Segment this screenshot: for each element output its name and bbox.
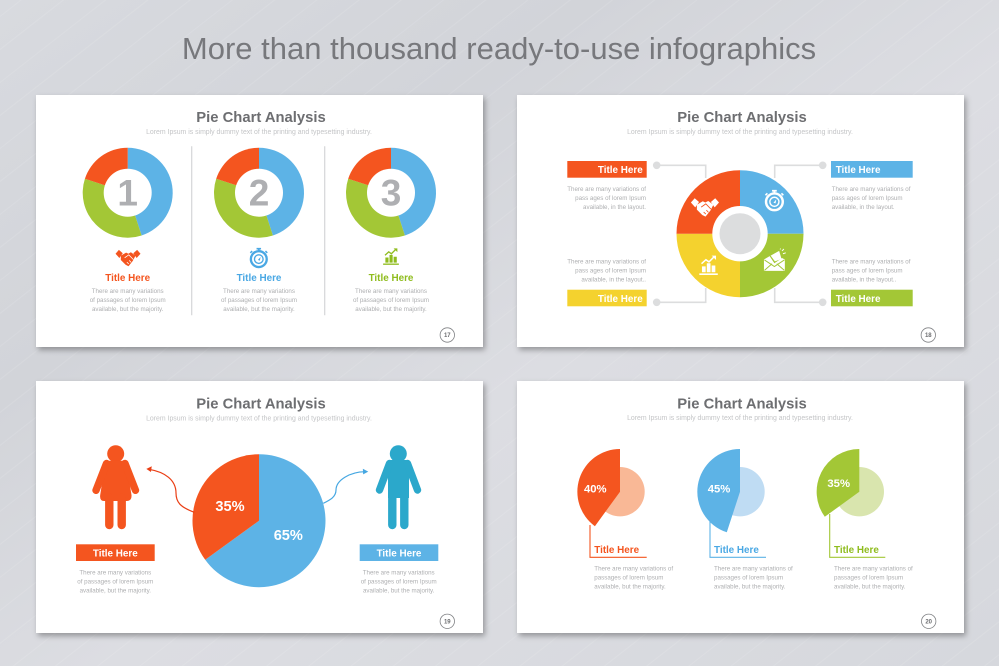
page number: 20 — [925, 620, 933, 626]
text bottom left: pass ages of lorem Ipsum — [575, 268, 646, 275]
text left: There are many variations — [79, 570, 151, 577]
sector 35% — [817, 449, 885, 557]
text top right — [832, 186, 911, 211]
label: red: Title Here — [598, 165, 643, 176]
column 1 text: available, but the majority. — [594, 584, 666, 591]
column 2 text: available, but the majority. — [714, 584, 786, 591]
donut 3: 3 — [381, 173, 401, 214]
donut 2: 2 — [249, 173, 269, 214]
sector 40% — [577, 449, 647, 557]
column 3 text: available, but the majority. — [355, 306, 427, 313]
label: male: Title Here — [377, 549, 422, 560]
icon: growth chart — [699, 256, 718, 275]
text bottom right: available, in the layout.. — [832, 277, 897, 284]
text left: of passages of lorem Ipsum — [77, 579, 153, 586]
column 2 text: of passages of lorem Ipsum — [221, 297, 297, 304]
column 1 text: There are many variations — [92, 288, 164, 295]
page number — [440, 328, 454, 342]
text bottom right: pass ages of lorem Ipsum — [832, 268, 903, 275]
text top left: There are many variations of — [567, 186, 646, 193]
column 2 text: There are many variations of — [714, 566, 793, 573]
donut 1: 1 — [117, 173, 138, 214]
icon: stopwatch — [765, 190, 784, 210]
page number: 18 — [925, 333, 932, 339]
column 2 text: Title Here — [237, 273, 282, 284]
pie chart — [192, 454, 325, 587]
heading: Pie Chart Analysis — [196, 397, 326, 413]
column 2 text: Title Here — [714, 545, 759, 556]
text right: There are many variations — [363, 570, 435, 577]
text bottom left: available, in the layout.. — [581, 277, 646, 284]
label: red — [567, 161, 647, 178]
icon: handshake — [691, 198, 719, 217]
label: blue — [831, 161, 913, 178]
page number — [921, 328, 936, 342]
text right — [361, 570, 437, 595]
column 1 text: of passages of lorem Ipsum — [90, 297, 166, 304]
column 3 text — [834, 545, 913, 591]
column 2 text: available, but the majority. — [223, 306, 295, 313]
label: green — [831, 290, 913, 306]
panel: three donut charts — [36, 95, 483, 347]
icon: male figure — [380, 445, 418, 525]
text right: available, but the majority. — [363, 588, 435, 595]
label: female: Title Here — [93, 549, 138, 560]
donut 1 — [83, 148, 173, 238]
text right: of passages of lorem Ipsum — [361, 579, 437, 586]
connectors — [653, 162, 826, 306]
column 3 text: available, but the majority. — [834, 584, 906, 591]
column 3 text: passages of lorem Ipsum — [834, 575, 903, 582]
column 3 text: Title Here — [369, 273, 414, 284]
column 1 text — [594, 545, 673, 591]
value 40%: 40% — [584, 483, 607, 495]
donut 2 — [214, 148, 304, 238]
value 65%: 65% — [274, 528, 303, 544]
column 1 text: Title Here — [105, 273, 151, 284]
icon: stopwatch — [250, 248, 268, 267]
column 3 text — [353, 273, 429, 313]
quadrant pie — [676, 170, 804, 297]
subtitle: Lorem Ipsum is simply dummy text of the printing and typesetting industry. — [146, 416, 372, 423]
page number: 17 — [444, 333, 451, 339]
label: female — [76, 544, 155, 561]
column 3 text: There are many variations of — [834, 566, 913, 573]
donut 3 — [346, 148, 436, 238]
panel: gender split pie — [36, 381, 483, 633]
page number: 19 — [444, 620, 451, 626]
heading: Pie Chart Analysis — [677, 396, 807, 412]
text top left: pass ages of lorem Ipsum — [575, 195, 646, 202]
label: yellow — [567, 290, 647, 306]
column 2 text — [714, 545, 793, 591]
column 3 text: of passages of lorem Ipsum — [353, 297, 429, 304]
column 1 text: Title Here — [594, 545, 640, 556]
text bottom left: There are many variations of — [567, 259, 646, 266]
text top right: pass ages of lorem Ipsum — [832, 195, 903, 202]
page number — [922, 614, 936, 628]
text top right: available, in the layout. — [832, 204, 895, 211]
panel: three offset sectors — [517, 381, 964, 633]
text bottom right — [832, 259, 911, 284]
icon: growth chart — [383, 248, 399, 265]
label: male — [360, 544, 438, 561]
column 3 text: Title Here — [834, 545, 879, 556]
column 3 text: There are many variations — [355, 288, 427, 295]
icon: handshake — [116, 250, 140, 266]
column 1 text: There are many variations of — [594, 566, 673, 573]
text left — [77, 570, 153, 595]
column 1 text — [90, 273, 166, 313]
label: green: Title Here — [836, 294, 881, 305]
column 2 text — [221, 273, 297, 313]
arrow to male — [323, 470, 367, 503]
text left: available, but the majority. — [80, 588, 151, 595]
subtitle: Lorem Ipsum is simply dummy text of the printing and typesetting industry. — [146, 129, 372, 136]
column 1 text: passages of lorem Ipsum — [594, 575, 663, 582]
page number — [440, 614, 454, 628]
label: blue: Title Here — [836, 165, 881, 176]
panel: four-quadrant pie — [517, 95, 964, 347]
value 35%: 35% — [827, 478, 850, 490]
value 35%: 35% — [215, 499, 245, 515]
text bottom left — [567, 259, 646, 284]
text bottom right: There are many variations of — [832, 259, 911, 266]
column 2 text: There are many variations — [223, 288, 295, 295]
text top left: available, in the layout. — [583, 204, 646, 211]
label: yellow: Title Here — [598, 294, 643, 305]
heading: Pie Chart Analysis — [677, 110, 807, 126]
sector 45% — [697, 449, 766, 557]
arrow to female — [148, 467, 194, 512]
subtitle: Lorem Ipsum is simply dummy text of the printing and typesetting industry. — [627, 415, 853, 422]
value 45%: 45% — [708, 483, 730, 495]
column 1 text: available, but the majority. — [92, 306, 164, 313]
icon: envelope — [764, 249, 786, 271]
divider lines — [192, 146, 325, 315]
heading: Pie Chart Analysis — [196, 110, 326, 126]
main title: More than thousand ready-to-use infographics — [182, 31, 816, 66]
subtitle: Lorem Ipsum is simply dummy text of the printing and typesetting industry. — [627, 129, 853, 136]
text top left — [567, 186, 646, 211]
text top right: There are many variations of — [832, 186, 911, 193]
icon: female figure — [96, 445, 136, 525]
column 2 text: passages of lorem Ipsum — [714, 575, 783, 582]
